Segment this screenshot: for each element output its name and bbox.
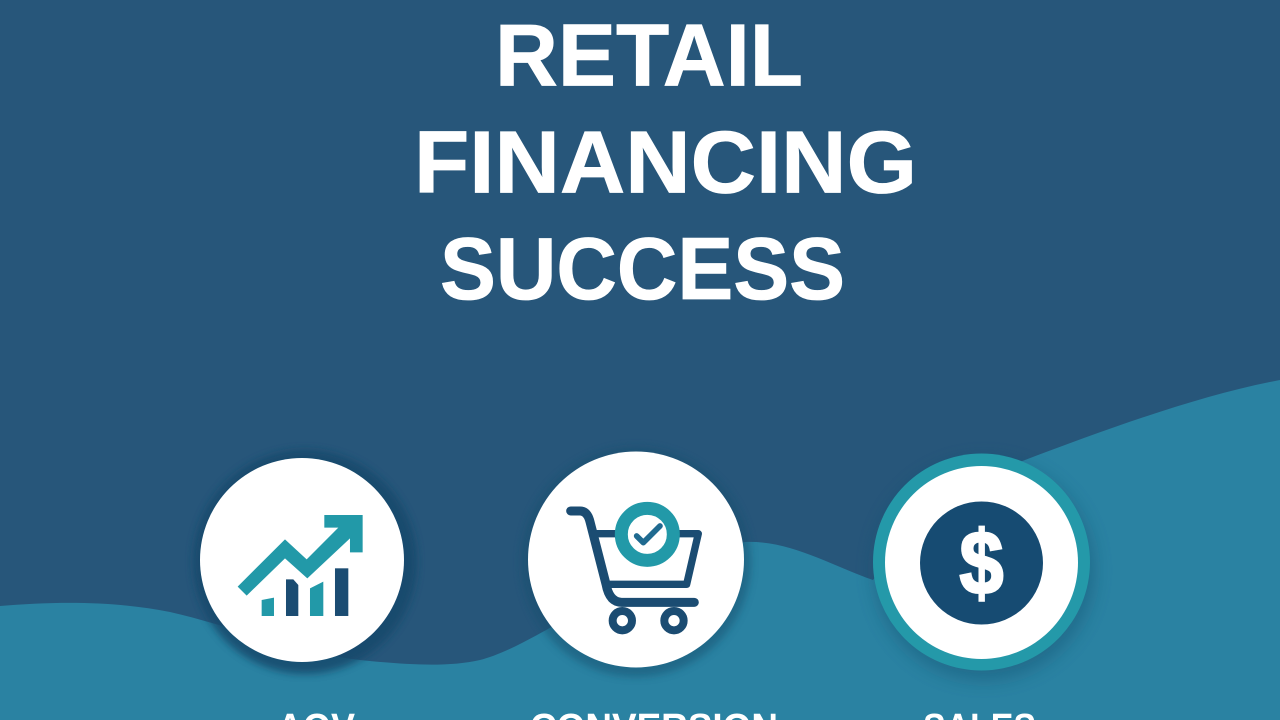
icon: sales dollar badge: $ bbox=[960, 514, 1004, 614]
title: SUCCESS bbox=[440, 219, 845, 318]
icon: conversion shopping cart badge bbox=[521, 447, 751, 677]
title: RETAIL bbox=[495, 6, 803, 104]
icon: sales dollar badge bbox=[873, 454, 1094, 680]
title bbox=[414, 6, 917, 318]
teal wave bbox=[0, 380, 1280, 720]
icon: AOV growth chart badge bbox=[193, 450, 417, 674]
title: FINANCING bbox=[414, 112, 917, 212]
